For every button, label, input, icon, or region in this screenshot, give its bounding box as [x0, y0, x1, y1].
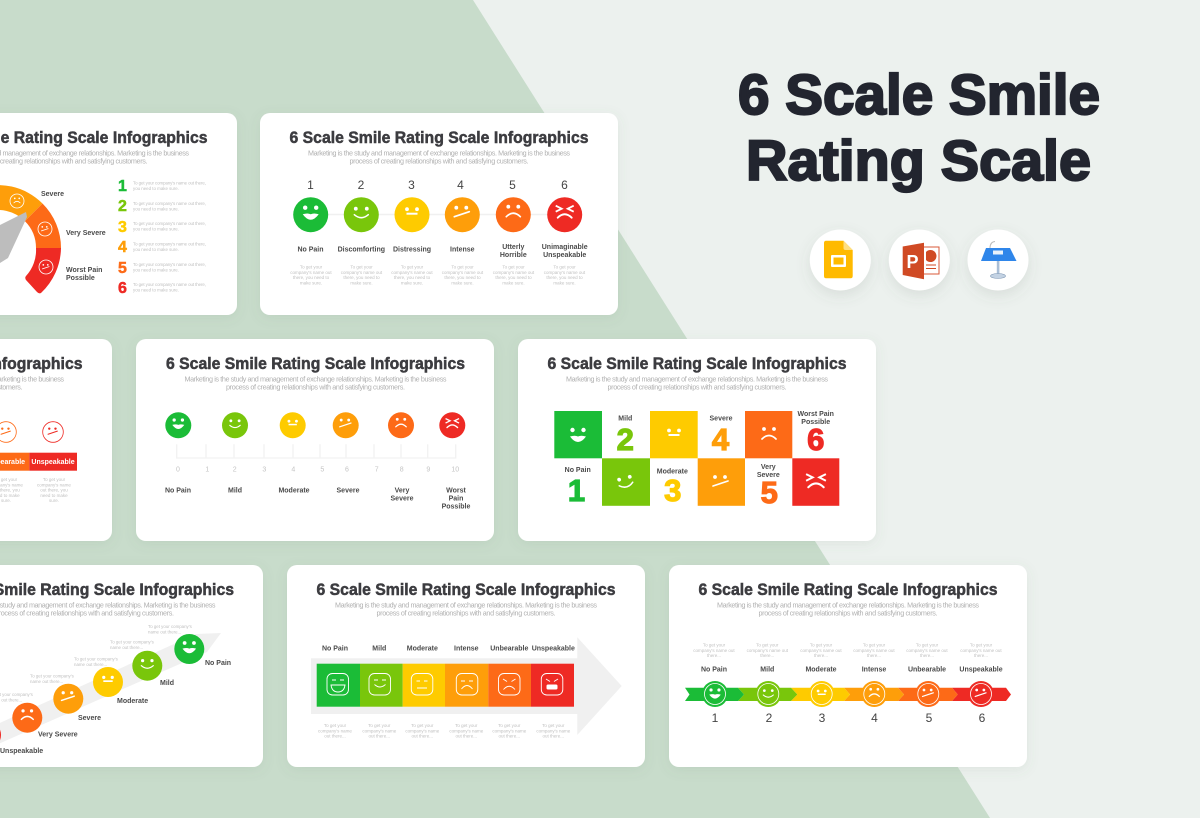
top row numbers and labels: 6 — [807, 422, 824, 457]
numbered list: you need to make sure. — [133, 206, 179, 211]
subtitle — [308, 148, 570, 166]
descriptions: name out there... — [110, 645, 143, 650]
labels: Discomforting — [338, 246, 385, 253]
panel: horizontal arrow scale — [287, 565, 645, 767]
heading: 6 Scale Smile Rating Scale Infographics — [316, 581, 616, 599]
numbers: 3 — [408, 178, 415, 192]
descriptions: To get your — [810, 642, 833, 648]
heading: 6 Scale Smile Rating Scale Infographics — [290, 129, 588, 147]
descriptions: company's name out — [290, 270, 332, 275]
descriptions: out there... — [324, 734, 346, 739]
subtitle — [717, 600, 979, 618]
descriptions: there... — [867, 653, 881, 658]
labels: Very — [395, 487, 410, 494]
subtitle: Marketing is the study and management of exchange relationships. Marketing is the business — [717, 600, 979, 610]
panel: smiley row — [260, 113, 618, 315]
numbers: 1 — [307, 178, 314, 192]
descriptions: company's name — [449, 728, 484, 733]
top row numbers and labels: Severe — [710, 416, 733, 422]
subtitle — [0, 600, 216, 618]
numbers: 1 — [712, 711, 719, 725]
labels: Intense — [454, 646, 479, 653]
labels: Unspeakable — [959, 667, 1003, 674]
descriptions: out there, you — [40, 488, 68, 493]
descriptions: name out there... — [148, 630, 181, 634]
ruler: 0 — [176, 467, 180, 474]
descriptions: make sure. — [451, 280, 474, 285]
gauge labels: Possible — [66, 275, 95, 282]
numbered list: 3 — [118, 219, 127, 236]
numbered list: you need to make sure. — [133, 247, 179, 252]
gauge labels: Severe — [41, 191, 64, 198]
numbers: 2 — [358, 178, 365, 192]
icon: powerpoint: P — [906, 252, 919, 272]
descriptions: company's name — [405, 728, 440, 733]
labels: Unimaginable — [542, 244, 588, 251]
colored bar — [0, 453, 77, 471]
labels — [0, 660, 231, 755]
descriptions: company's name out — [391, 270, 433, 275]
descriptions: company's name out — [853, 648, 895, 653]
numbered list: you need to make sure. — [133, 226, 179, 231]
numbers — [307, 178, 568, 192]
descriptions: To get your — [411, 723, 434, 728]
descriptions: there... — [920, 653, 934, 658]
numbers: 5 — [926, 711, 933, 725]
panel: diagonal arrow scale — [0, 565, 263, 767]
descriptions: To get your — [368, 723, 391, 728]
top row numbers and labels: 2 — [617, 422, 634, 457]
ruler: 1 — [205, 467, 209, 474]
outlined faces — [0, 422, 63, 442]
ruler: 5 — [320, 467, 324, 474]
ruler: 10 — [451, 467, 459, 474]
subtitle: Marketing is the study and management of exchange relationships. Marketing is the business — [308, 148, 570, 158]
labels: Intense — [450, 246, 475, 253]
descriptions: out there... — [412, 734, 433, 739]
labels: Mild — [760, 667, 774, 674]
labels — [165, 487, 470, 511]
descriptions: To get your — [542, 723, 565, 728]
descriptions: need to make — [40, 493, 68, 498]
labels: Horrible — [500, 252, 527, 259]
ruler: 9 — [426, 467, 430, 474]
labels: Severe — [391, 496, 414, 502]
heading: 6 Scale Smile Rating Scale Infographics — [166, 355, 465, 373]
descriptions: To get your — [703, 642, 726, 648]
descriptions — [0, 477, 71, 503]
descriptions: make sure. — [350, 280, 373, 285]
labels: Pain — [449, 496, 463, 502]
subtitle: process of creating relationships with and satisfying customers. — [0, 608, 174, 618]
numbers: 4 — [871, 711, 878, 725]
descriptions: there... — [974, 653, 988, 658]
numbers: 6 — [979, 711, 986, 725]
descriptions: company's name out — [906, 648, 948, 653]
top row numbers and labels: 4 — [712, 422, 730, 457]
labels: Unbearable — [490, 646, 528, 653]
descriptions: out there... — [456, 734, 477, 739]
subtitle — [566, 374, 828, 392]
descriptions: To get your company's — [30, 674, 75, 678]
descriptions: company's name out — [442, 270, 484, 275]
subtitle — [335, 600, 597, 618]
descriptions: there... — [707, 653, 721, 658]
descriptions: name out there... — [74, 662, 107, 667]
descriptions: To get your — [756, 642, 779, 648]
descriptions: company's name — [37, 482, 71, 487]
descriptions — [693, 642, 1002, 658]
icon: keynote — [968, 230, 1028, 290]
ruler: 3 — [262, 467, 266, 474]
descriptions: name out there... — [30, 679, 63, 684]
numbers: 6 — [561, 178, 568, 192]
descriptions: make sure. — [300, 280, 322, 285]
numbered list: To get your company's name out there, — [133, 221, 206, 226]
top row numbers and labels — [617, 411, 834, 457]
descriptions: there... — [760, 653, 774, 658]
smiley faces — [0, 634, 204, 750]
descriptions: there, you need to — [444, 275, 481, 280]
gauge chart — [0, 185, 61, 293]
descriptions — [318, 723, 571, 739]
numbered list: 2 — [118, 198, 127, 215]
subtitle: process of creating relationships with and satisfying customers. — [226, 382, 405, 392]
descriptions: company's name out — [800, 648, 842, 653]
colored bar with faces — [317, 664, 574, 707]
diagonal arrow — [0, 633, 221, 752]
labels: Unbearable — [908, 667, 946, 674]
numbered list: To get your company's name out there, — [133, 262, 206, 267]
labels: Severe — [337, 487, 360, 494]
descriptions: company's name out — [693, 648, 735, 653]
bottom row numbers and labels: No Pain — [565, 467, 591, 474]
descriptions: To get your — [350, 264, 373, 270]
bottom row numbers and labels — [565, 464, 780, 510]
descriptions: To get your — [401, 264, 424, 270]
bottom row numbers and labels: 3 — [664, 473, 681, 508]
numbered list: To get your company's name out there, — [133, 242, 206, 246]
icon: powerpoint — [889, 230, 950, 290]
descriptions: company's name — [362, 728, 397, 733]
descriptions: company's name — [318, 728, 352, 733]
numbers: 2 — [766, 711, 773, 725]
labels: Unspeakable — [543, 252, 586, 259]
labels: Worst — [446, 487, 467, 494]
labels: Mild — [160, 680, 174, 687]
subtitle: process of creating relationships with and satisfying customers. — [608, 382, 786, 392]
ruler: 7 — [375, 467, 379, 474]
ruler — [176, 444, 459, 474]
descriptions: company's name out — [493, 270, 535, 275]
descriptions: there, you need to — [293, 275, 330, 280]
descriptions — [290, 264, 586, 285]
descriptions: To get your — [502, 264, 525, 270]
descriptions: company's name out — [544, 270, 586, 275]
numbered list: 1 — [118, 178, 127, 195]
subtitle: process of creating relationships with and satisfying customers. — [758, 608, 938, 618]
descriptions: there, you need to — [343, 275, 380, 280]
labels: Unspeakable — [532, 646, 575, 653]
descriptions: To get your company's — [74, 656, 119, 662]
labels: Mild — [372, 646, 386, 653]
heading: 6 Scale Smile Rating Scale Infographics — [548, 355, 846, 373]
descriptions — [0, 624, 193, 702]
labels: Moderate — [805, 667, 837, 674]
bottom row numbers and labels: 1 — [568, 473, 585, 508]
top row numbers and labels: Possible — [801, 419, 830, 426]
top row numbers and labels: Mild — [618, 416, 632, 422]
numbered list: you need to make sure. — [133, 267, 179, 272]
chevron arrow — [685, 688, 1011, 701]
descriptions: make sure. — [553, 280, 576, 285]
subtitle — [184, 374, 447, 392]
gauge labels — [41, 191, 106, 282]
numbered list: To get your company's name out there, — [133, 180, 206, 186]
numbers: 3 — [819, 711, 826, 725]
descriptions: To get your — [863, 642, 886, 648]
labels: No Pain — [205, 660, 231, 667]
descriptions: out there... — [543, 734, 564, 739]
subtitle — [0, 374, 64, 392]
descriptions: make sure. — [401, 280, 423, 285]
ruler: 2 — [233, 467, 237, 474]
bottom row numbers and labels: Severe — [757, 472, 780, 479]
numbers: 4 — [457, 178, 464, 192]
subtitle: process of creating relationships with and satisfying customers. — [350, 156, 528, 166]
labels: No Pain — [701, 667, 727, 674]
descriptions: To get your — [553, 264, 576, 270]
labels: Possible — [442, 504, 470, 511]
descriptions: company's name — [536, 728, 571, 733]
descriptions: To get your — [324, 723, 347, 728]
descriptions: make sure. — [502, 280, 525, 285]
smiley badges — [702, 681, 994, 707]
gauge labels: Very Severe — [66, 230, 106, 237]
numbered list: 5 — [118, 260, 127, 277]
subtitle: Marketing is the study and management of exchange relationships. Marketing is the business — [184, 374, 447, 384]
ruler: 8 — [400, 467, 404, 474]
descriptions: sure. — [49, 498, 59, 503]
numbered list: you need to make sure. — [133, 287, 179, 292]
labels: Severe — [78, 715, 101, 722]
colored squares — [554, 411, 839, 506]
numbered list: To get your company's name out there, — [133, 282, 206, 287]
title: 6 Scale Smile — [738, 63, 1100, 127]
heading: 6 Scale Smile Rating Scale Infographics — [698, 581, 998, 599]
labels: Intense — [862, 667, 886, 674]
descriptions: To get your company's — [148, 624, 193, 629]
subtitle: Marketing is the study and management of exchange relationships. Marketing is the business — [566, 374, 828, 384]
smiley faces — [165, 412, 465, 438]
descriptions: To get your — [916, 642, 939, 648]
descriptions: To get your — [451, 264, 474, 270]
title: Rating Scale — [746, 129, 1091, 193]
ruler: 4 — [291, 467, 295, 474]
descriptions: company's name out — [960, 648, 1002, 653]
smiley faces — [293, 197, 582, 232]
labels — [297, 244, 588, 259]
numbered list — [118, 178, 206, 297]
descriptions: To get your — [455, 723, 478, 728]
numbered list: 6 — [118, 280, 127, 297]
top row numbers and labels: Worst Pain — [797, 411, 834, 418]
labels: No Pain — [297, 246, 324, 253]
numbers: 5 — [509, 178, 516, 192]
descriptions: out there... — [499, 734, 520, 739]
panel: outlined faces with bar — [0, 339, 112, 541]
numbered list: you need to make sure. — [133, 186, 179, 191]
labels: Utterly — [502, 244, 524, 251]
labels: Distressing — [393, 246, 431, 253]
labels: Moderate — [278, 487, 310, 494]
colored bar: Unspeakable — [31, 459, 75, 466]
labels: No Pain — [322, 646, 348, 653]
descriptions: there, you need to — [394, 275, 431, 280]
descriptions: company's name — [492, 728, 527, 733]
descriptions: company's name out — [747, 648, 789, 653]
bottom row numbers and labels: Moderate — [657, 468, 688, 476]
numbered list: To get your company's name out there, — [133, 201, 206, 206]
bottom row numbers and labels: 5 — [761, 475, 778, 510]
icon: google slides — [810, 230, 871, 290]
labels: Very Severe — [38, 732, 78, 738]
labels — [701, 667, 1003, 674]
labels: Mild — [228, 487, 242, 494]
labels — [322, 646, 575, 653]
gauge labels: Worst Pain — [66, 267, 102, 274]
labels: Moderate — [407, 646, 438, 653]
title — [738, 63, 1100, 193]
descriptions: To get your company's — [110, 640, 155, 644]
panel: gauge scale — [0, 113, 237, 315]
panel: ruler scale — [136, 339, 494, 541]
ruler: 6 — [345, 467, 349, 474]
labels: Moderate — [117, 698, 148, 705]
panel: chevron timeline scale — [669, 565, 1027, 767]
descriptions: sure. — [1, 498, 11, 503]
descriptions: To get your — [970, 642, 993, 648]
labels: Unspeakable — [0, 748, 43, 755]
numbered list: 4 — [118, 239, 127, 256]
subtitle — [0, 148, 189, 166]
descriptions: out there... — [369, 734, 390, 739]
descriptions: To get your — [43, 477, 66, 482]
subtitle: process of creating relationships with and satisfying customers. — [376, 608, 556, 618]
descriptions: there, you need to — [495, 275, 532, 280]
descriptions: there... — [814, 653, 828, 658]
descriptions: To get your — [300, 264, 323, 270]
descriptions: To get your — [498, 723, 521, 728]
large arrow — [311, 637, 622, 735]
bottom row numbers and labels: Very — [761, 464, 776, 471]
numbers — [712, 711, 986, 725]
labels: No Pain — [165, 487, 191, 494]
subtitle: Marketing is the study and management of exchange relationships. Marketing is the business — [335, 600, 597, 610]
panel: checkerboard scale — [518, 339, 876, 541]
descriptions: there, you need to — [546, 275, 583, 280]
descriptions: company's name out — [341, 270, 383, 275]
